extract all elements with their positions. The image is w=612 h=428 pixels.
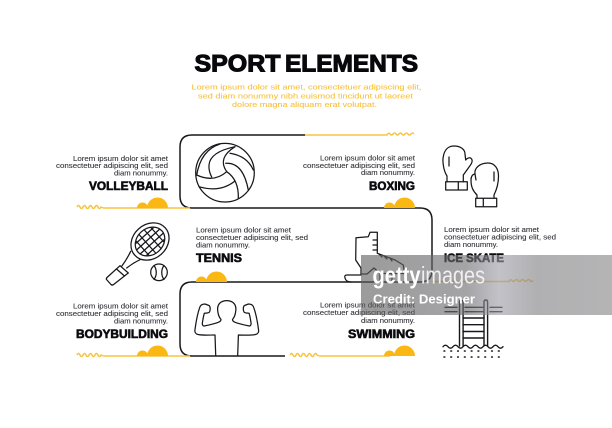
text block: ice skate: diam nonummy. xyxy=(444,240,498,249)
title: ELEMENTS xyxy=(285,50,418,78)
connector accents: yellow lines and waves xyxy=(77,133,533,356)
text block: boxing: Lorem ipsum dolor sit amet xyxy=(320,154,415,162)
text block: bodybuilding xyxy=(56,302,168,341)
text block: volleyball: consectetuer adipiscing elit, sed xyxy=(56,161,168,170)
text block: tennis: consectetuer adipiscing elit, sed xyxy=(196,233,308,242)
heading: ice skate: ICE SKATE xyxy=(444,253,504,265)
icon: swimming pool ladder xyxy=(443,300,504,357)
subtitle: Lorem ipsum dolor sit amet, consectetuer adipiscing elit, xyxy=(192,82,422,92)
text block: volleyball: Lorem ipsum dolor sit amet xyxy=(73,154,168,163)
text block: volleyball xyxy=(56,154,168,193)
watermark band xyxy=(361,255,612,315)
text block: ice skate xyxy=(444,225,556,265)
text block: tennis: diam nonummy. xyxy=(196,240,250,249)
text block: boxing: consectetuer adipiscing elit, sed xyxy=(303,161,415,170)
subtitle: sed diam nonummy nibh euismod tincidunt ut laoreet xyxy=(198,92,414,100)
decorative hills: swimming xyxy=(384,346,415,356)
text block: bodybuilding: diam nonummy. xyxy=(114,316,168,325)
title: SPORT xyxy=(194,50,281,78)
text block: bodybuilding: consectetuer adipiscing elit, sed xyxy=(56,309,168,318)
text block: boxing xyxy=(303,154,415,193)
heading: boxing: BOXING xyxy=(369,181,415,193)
watermark: images: images xyxy=(421,262,485,290)
decorative hills: boxing xyxy=(384,198,415,208)
text block: swimming: consectetuer adipiscing elit, sed xyxy=(303,308,415,317)
title xyxy=(194,50,418,78)
heading: volleyball: VOLLEYBALL xyxy=(89,181,168,193)
text block: tennis: Lorem ipsum dolor sit amet xyxy=(196,226,291,234)
icon: ice skate xyxy=(345,232,404,282)
decorative hills: tennis xyxy=(196,272,227,282)
watermark: credit: Credit: Designer xyxy=(373,292,475,306)
heading: bodybuilding: BODYBUILDING xyxy=(76,329,168,341)
icon: volleyball xyxy=(196,143,254,202)
text block: ice skate: consectetuer adipiscing elit, sed xyxy=(444,232,556,241)
icon: tennis racket and ball xyxy=(106,215,177,285)
text block: tennis xyxy=(196,226,308,265)
icon: boxing gloves xyxy=(443,146,498,207)
text block: boxing: diam nonummy. xyxy=(361,168,415,177)
icon: bodybuilder xyxy=(195,301,259,355)
connector: panel outline dark xyxy=(180,135,432,356)
watermark: getty: getty xyxy=(372,262,421,290)
text block: bodybuilding: Lorem ipsum dolor sit amet xyxy=(73,302,168,311)
subtitle xyxy=(192,82,422,109)
text block: swimming xyxy=(303,301,415,341)
heading: swimming: SWIMMING xyxy=(348,329,415,341)
text block: swimming: diam nonummy. xyxy=(361,316,415,325)
decorative hills: bodybuilding xyxy=(137,346,168,356)
text block: swimming: Lorem ipsum dolor sit amet xyxy=(320,301,415,310)
decorative hills: volleyball xyxy=(137,198,168,208)
subtitle: dolore magna aliquam erat volutpat. xyxy=(232,100,377,109)
heading: tennis: TENNIS xyxy=(196,253,242,265)
text block: ice skate: Lorem ipsum dolor sit amet xyxy=(444,225,539,234)
text block: volleyball: diam nonummy. xyxy=(114,168,168,178)
